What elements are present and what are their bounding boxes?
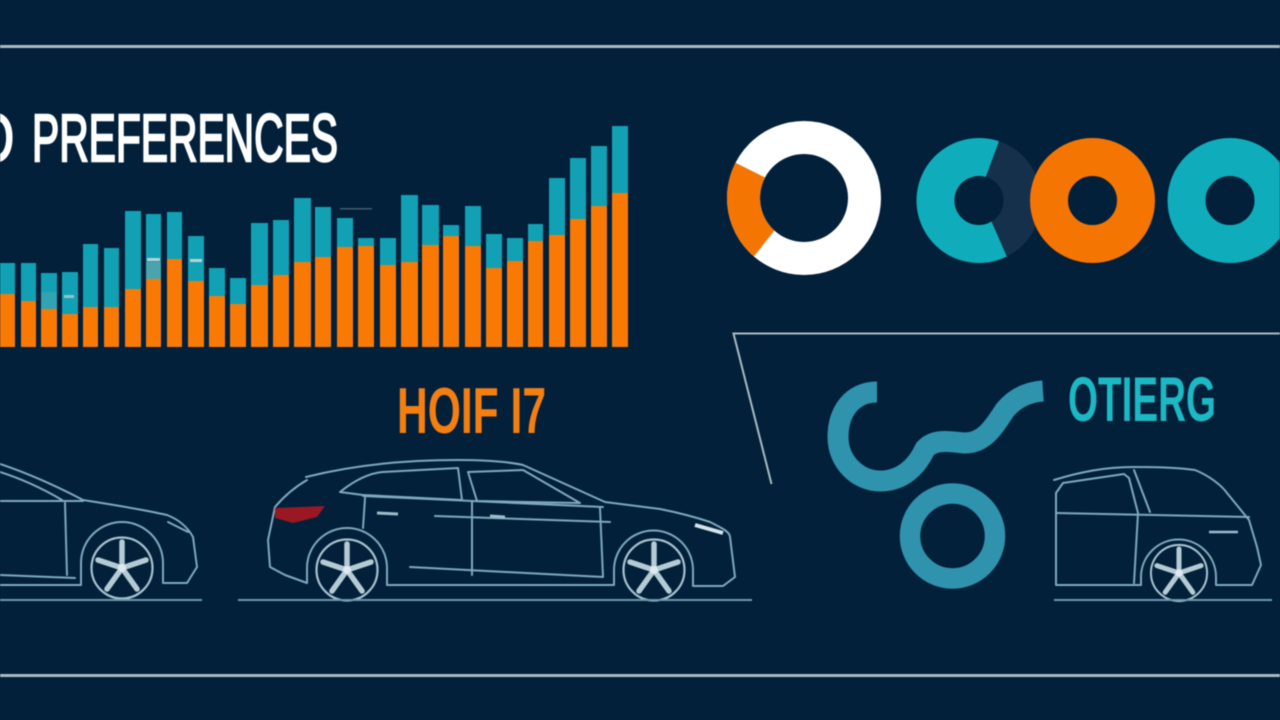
icon: teal ring [910, 494, 995, 578]
bottom rule [0, 674, 1280, 677]
headlight [695, 525, 723, 533]
car: right [1054, 467, 1272, 601]
title: preferences [0, 101, 338, 176]
icon: teal swirl [838, 391, 1043, 481]
donut chart: white and orange [727, 138, 864, 258]
stacked bar chart [0, 126, 628, 347]
car: left [0, 464, 202, 600]
top rule [0, 45, 1280, 48]
donut chart: orange [1049, 157, 1136, 244]
title: preferences: PREFERENCES [32, 101, 338, 176]
panel outline: others [734, 334, 1280, 484]
taillight [275, 506, 325, 523]
donut chart: teal with dark segment [917, 138, 1022, 263]
car: center [238, 460, 752, 600]
orange label: HOIF I7 [397, 374, 546, 447]
donut chart: teal [1186, 157, 1274, 244]
